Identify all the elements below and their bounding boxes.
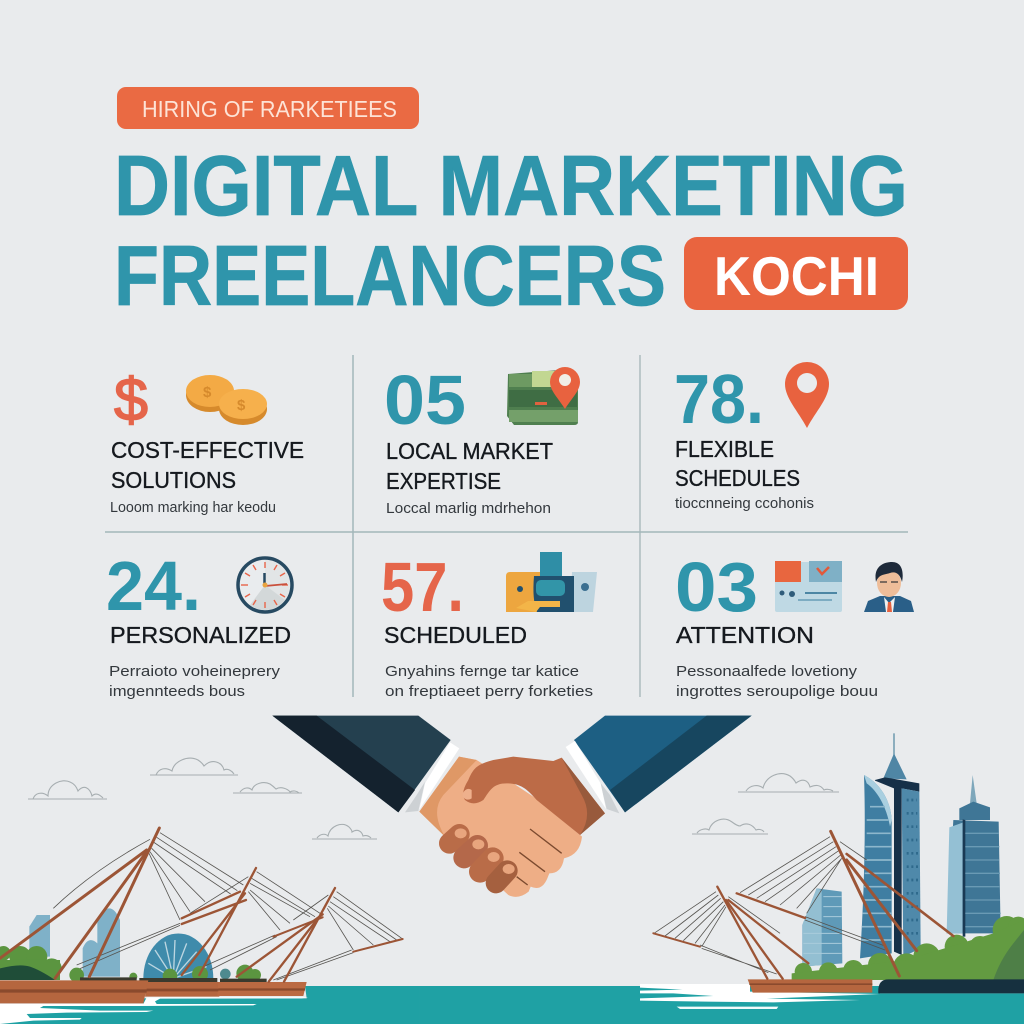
- right scene: skyline and fishing nets: [640, 733, 1024, 1024]
- icon: printer device: [506, 552, 597, 612]
- icon: coins: $: [203, 384, 212, 401]
- heading: ATTENTION: [676, 622, 814, 648]
- description: Perraioto voheineprery: [109, 663, 281, 680]
- icon: person in suit: [864, 562, 914, 612]
- panel: cost-effective solutions: [110, 366, 304, 516]
- clouds: [28, 758, 839, 839]
- icon: coins: [186, 375, 267, 425]
- boat platform: [748, 979, 872, 993]
- foam: [0, 997, 308, 1024]
- ferris wheel: [143, 933, 213, 978]
- tall tower: [860, 733, 921, 958]
- small building: [802, 888, 842, 967]
- handshake: [272, 716, 752, 897]
- description: Gnyahins fernge tar katice: [385, 663, 579, 680]
- panel: local market expertise: [384, 361, 580, 517]
- net two: [182, 868, 323, 977]
- net one: [0, 828, 246, 978]
- panel: flexible schedules: [674, 360, 829, 512]
- water: [640, 984, 1024, 1024]
- icon: dollar sign: $: [114, 366, 148, 433]
- location badge: Kochi: [684, 237, 908, 310]
- fishing platforms: [0, 977, 307, 1003]
- location badge: Kochi: KOCHI: [714, 245, 879, 307]
- light hand: [419, 757, 582, 897]
- icon: cash stack and pin: [507, 367, 580, 425]
- description line 2: ingrottes seroupolige bouu: [676, 683, 878, 700]
- number: 03: [675, 548, 758, 626]
- water: [0, 986, 420, 1024]
- title: FREELANCERS: [114, 229, 666, 324]
- top badge: HIRING OF RARKETIEES: [142, 96, 397, 122]
- fingers: [449, 828, 515, 883]
- heading: PERSONALIZED: [110, 622, 291, 648]
- heading line 2: EXPERTISE: [386, 468, 501, 494]
- icon: clock: [238, 558, 292, 612]
- heading line 2: SOLUTIONS: [111, 467, 236, 493]
- description line 2: on freptiaeet perry forketies: [385, 683, 593, 700]
- title: DIGITAL MARKETING: [114, 139, 908, 234]
- dark hand: [463, 757, 605, 835]
- icon: location pin: [785, 362, 829, 428]
- description: Loccal marlig mdrhehon: [386, 500, 551, 517]
- heading: SCHEDULED: [384, 622, 527, 648]
- heading line 2: SCHEDULES: [675, 465, 800, 491]
- left sleeve: [272, 716, 451, 812]
- icon: coins: $: [237, 397, 246, 414]
- icon: profile card: [775, 561, 842, 612]
- panel: personalized: [106, 547, 292, 700]
- number: 78.: [674, 360, 764, 438]
- panel: attention: [675, 548, 914, 700]
- description: Looom marking har keodu: [110, 499, 276, 516]
- description: tioccnneing ccohonis: [675, 495, 814, 512]
- right sleeve: [574, 716, 752, 812]
- title: [114, 139, 908, 324]
- far net: [653, 887, 808, 979]
- shirt cuffs: [405, 741, 619, 813]
- bushes: [0, 946, 261, 983]
- number: 57.: [381, 548, 464, 626]
- number: 24.: [106, 547, 201, 625]
- near net: [737, 831, 953, 976]
- background buildings: [29, 908, 120, 977]
- left scene: Chinese fishing nets and skyline: [0, 828, 420, 1024]
- bushes: [792, 916, 1024, 981]
- heading: FLEXIBLE: [675, 436, 774, 462]
- heading: COST-EFFECTIVE: [111, 437, 304, 463]
- seawall: [878, 979, 1024, 993]
- heading: LOCAL MARKET: [386, 438, 553, 464]
- number: 05: [384, 361, 466, 439]
- description line 2: imgennteeds bous: [109, 683, 245, 700]
- net three: [269, 888, 403, 982]
- bottom water: [420, 986, 640, 1024]
- description: Pessonaalfede lovetiony: [676, 663, 858, 680]
- top badge: [117, 87, 419, 129]
- panel: scheduled: [381, 548, 597, 700]
- second tower: [947, 775, 1001, 937]
